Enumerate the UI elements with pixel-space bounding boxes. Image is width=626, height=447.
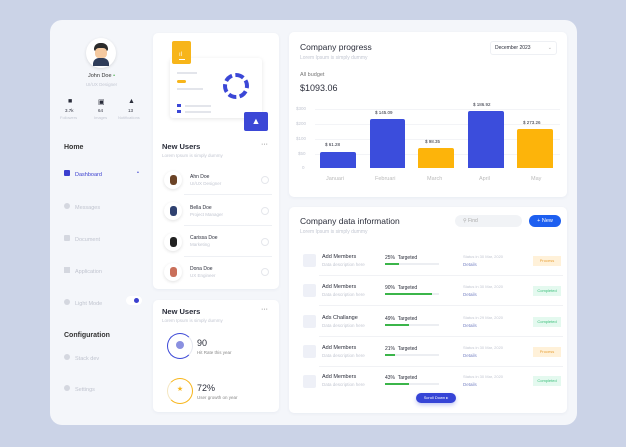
panel: company data information: Lorem Ipsum is simply dummy [300, 229, 368, 235]
panel: new users stats: 72% [197, 383, 215, 393]
bar chart: $ 61.28 [325, 142, 340, 147]
sidebar: Document [75, 237, 100, 243]
panel: company progress: Lorem Ipsum is simply dummy [300, 55, 368, 61]
search: ⚲ Find [463, 218, 478, 224]
stats: Images [94, 115, 107, 120]
sidebar [60, 38, 142, 393]
panel: new users stats: User growth on year [197, 395, 238, 400]
heading: New Users [162, 142, 200, 151]
bar chart: $100 [296, 136, 306, 141]
user rows: Project Manager [190, 212, 223, 217]
bar chart: $300 [296, 106, 306, 111]
panel: new users stats: 90 [197, 338, 207, 348]
rows: Completed [537, 378, 557, 383]
rows: Add Members [322, 374, 356, 380]
panel: new users stats [153, 300, 279, 412]
rows: Details [463, 353, 477, 358]
stats [60, 98, 140, 120]
panel: company data information [289, 207, 567, 413]
panel: new users list: Lorem Ipsum is simply dummy [162, 153, 223, 158]
new button [529, 215, 561, 227]
rows: 21% Targeted [385, 346, 417, 352]
illustration: ıl [179, 52, 182, 58]
panel: company progress: All budget [300, 72, 324, 78]
sidebar: Light Mode [75, 301, 102, 307]
stats: 13 [128, 108, 133, 113]
panel: new users stats: New Users [162, 307, 200, 316]
rows: Status in 30 Mar, 2020 [463, 254, 503, 259]
stats: 64 [98, 108, 103, 113]
rows: Status in 30 Mar, 2020 [463, 345, 503, 350]
panel: new users stats: ··· [261, 306, 268, 313]
scroll down button [416, 393, 456, 403]
rows: 25% Targeted [385, 255, 417, 261]
bar chart [296, 102, 560, 182]
rows: Add Members [322, 284, 356, 290]
nav items [64, 170, 139, 178]
date dropdown [490, 41, 557, 55]
rows: Details [463, 382, 477, 387]
profile name: John Doe • [88, 73, 115, 79]
panel: new users stats: Lorem Ipsum is simply dummy [162, 318, 223, 323]
rows: Process [540, 349, 554, 354]
stats: ▣ [98, 99, 105, 106]
rows: Process [540, 258, 554, 263]
bar chart: $200 [296, 121, 306, 126]
hit rate ring [167, 333, 193, 359]
rows [303, 254, 563, 388]
rows: Status in 29 Mar, 2020 [463, 315, 503, 320]
bar chart: $ 98.35 [425, 139, 440, 144]
rows: Add Members [322, 345, 356, 351]
budget: $1093.06 [300, 83, 338, 93]
growth ring [167, 378, 193, 404]
rows: Status in 30 Mar, 2020 [463, 374, 503, 379]
user rows: Carissa Doe [190, 235, 218, 241]
stats: ■ [68, 98, 72, 105]
illustration [169, 41, 268, 131]
stats: Followers [60, 115, 77, 120]
bar chart: $ 273.26 [523, 120, 541, 125]
rows: Details [463, 262, 477, 267]
rows: Details [463, 292, 477, 297]
bar chart: $ 186.92 [473, 102, 491, 107]
bar chart: 0 [302, 165, 305, 170]
rows: Data description here [322, 382, 365, 387]
rows: Completed [537, 319, 557, 324]
panel: new users list [153, 33, 279, 289]
main container [50, 20, 577, 425]
rows: Ads Challange [322, 315, 358, 321]
illustration: ▲ [252, 116, 260, 126]
rows: 49% Targeted [385, 316, 417, 322]
user rows: UI/UX Designer [190, 181, 221, 186]
user rows: UX Engineer [190, 273, 216, 278]
bar chart: March [427, 176, 442, 182]
growth ring: ★ [177, 386, 183, 393]
rows: Data description here [322, 323, 365, 328]
search [455, 215, 522, 227]
bar chart: May [531, 176, 541, 182]
sidebar: Application [75, 269, 102, 275]
new button: + New [537, 218, 553, 224]
configuration heading: Configuration [64, 332, 110, 339]
stats: 3.7k [65, 108, 74, 113]
user rows: Bella Doe [190, 205, 212, 211]
stats: Notifications [118, 115, 140, 120]
sidebar: Settings [75, 387, 95, 393]
bar chart: Februari [375, 176, 395, 182]
nav home: Home [64, 144, 83, 151]
rows: 90% Targeted [385, 285, 417, 291]
bar chart: April [479, 176, 490, 182]
user rows: Marketing [190, 242, 210, 247]
sidebar: Messages [75, 205, 100, 211]
rows: 43% Targeted [385, 375, 417, 381]
user rows: Dona Doe [190, 266, 213, 272]
scroll down button: Scroll Down ▸ [424, 395, 448, 400]
panel: company progress: Company progress [300, 42, 372, 52]
rows: Data description here [322, 292, 365, 297]
sidebar: Stack dev [75, 356, 99, 362]
user rows [163, 174, 272, 283]
rows: Add Members [322, 254, 356, 260]
rows: Data description here [322, 353, 365, 358]
toggle [126, 296, 142, 305]
nav items: • [137, 170, 139, 176]
bar chart: $50 [298, 151, 306, 156]
rows: Data description here [322, 262, 365, 267]
profile avatar [86, 38, 116, 68]
date dropdown: December 2023 [495, 45, 531, 51]
panel: new users list: ··· [261, 141, 268, 148]
panel: company progress [289, 32, 567, 197]
rows: Completed [537, 288, 557, 293]
panel: company data information: Company data information [300, 216, 400, 226]
rows: Details [463, 323, 477, 328]
stats: ▲ [128, 98, 135, 105]
date dropdown: ⌄ [548, 45, 552, 51]
sidebar: UI/UX Designer [86, 82, 117, 87]
rows: Status in 30 Mar, 2020 [463, 284, 503, 289]
bar chart: $ 145.09 [375, 110, 393, 115]
bar chart: Januari [326, 176, 344, 182]
user rows: Ahn Doe [190, 174, 209, 180]
nav items: Dashboard [75, 172, 102, 178]
panel: new users stats: Hit Rate this year [197, 350, 232, 355]
